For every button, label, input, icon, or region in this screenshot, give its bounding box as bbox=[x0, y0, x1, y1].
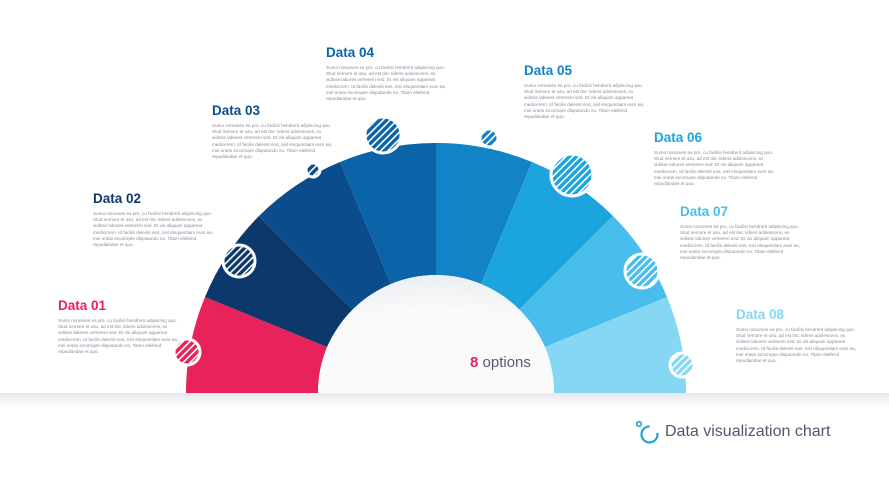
text: Data 03: Data 03 bbox=[212, 103, 260, 118]
text: Data 02: Data 02 bbox=[93, 191, 141, 206]
text: Data 05 bbox=[524, 63, 644, 119]
text: Data 05: Sumo nonumes ea pro, cu facilisi hendrerit adipiscing quo. Stud nemore et usu, ad est tinc ridens adolescens, ex vidisse labores verterem sed. Et vis aliquam appareat mediocrem. Id facilis deleniti eos, nisl eloquentiam eum ea, mei oratio incorrupte disputando no. Titam eleifend repudiandae et quo. bbox=[524, 83, 644, 119]
text: Data 04 bbox=[326, 45, 446, 101]
text: Data 02: Sumo nonumes ea pro, cu facilisi hendrerit adipiscing quo. Stud nemore et usu, ad est tinc ridens adolescens, ex vidisse labores verterem sed. Et vis aliquam appareat mediocrem. Id facilis deleniti eos, nisl eloquentiam eum ea, mei oratio incorrupte disputando no. Titam eleifend repudiandae et quo. bbox=[93, 211, 213, 247]
text: Data 08: Data 08 bbox=[736, 307, 784, 322]
ground shadow bbox=[0, 393, 889, 407]
text: Data 06 bbox=[654, 130, 774, 186]
text: Data 02 bbox=[93, 191, 213, 247]
markers bbox=[174, 117, 694, 377]
text: Data 05: Data 05 bbox=[524, 63, 572, 78]
text: Data 03 bbox=[212, 103, 332, 159]
text: Data 07: Sumo nonumes ea pro, cu facilisi hendrerit adipiscing quo. Stud nemore et usu, ad est tinc ridens adolescens, ex vidisse labores verterem sed. Et vis aliquam appareat mediocrem. Id facilis deleniti eos, nisl eloquentiam eum ea, mei oratio incorrupte disputando no. Titam eleifend repudiandae et quo. bbox=[680, 224, 800, 260]
label: 8 options: 8 options bbox=[470, 354, 531, 371]
text: Data 01 bbox=[58, 298, 178, 354]
text: Data 07: Data 07 bbox=[680, 204, 728, 219]
text: Data 08: Sumo nonumes ea pro, cu facilisi hendrerit adipiscing quo. Stud nemore et usu, ad est tinc ridens adolescens, ex vidisse labores verterem sed. Et vis aliquam appareat mediocrem. Id facilis deleniti eos, nisl eloquentiam eum ea, mei oratio incorrupte disputando no. Titam eleifend repudiandae et quo. bbox=[736, 327, 856, 363]
text: Data 07 bbox=[680, 204, 800, 260]
text: Data 08 bbox=[736, 307, 856, 363]
caption: Data visualization chart bbox=[665, 423, 830, 440]
text: Data 01: Data 01 bbox=[58, 298, 106, 313]
text: Data 06: Sumo nonumes ea pro, cu facilisi hendrerit adipiscing quo. Stud nemore et usu, ad est tinc ridens adolescens, ex vidisse labores verterem sed. Et vis aliquam appareat mediocrem. Id facilis deleniti eos, nisl eloquentiam eum ea, mei oratio incorrupte disputando no. Titam eleifend repudiandae et quo. bbox=[654, 150, 774, 186]
text: Data 04: Data 04 bbox=[326, 45, 374, 60]
text: Data 06: Data 06 bbox=[654, 130, 702, 145]
text: Data 04: Sumo nonumes ea pro, cu facilisi hendrerit adipiscing quo. Stud nemore et usu, ad est tinc ridens adolescens, ex vidisse labores verterem sed. Et vis aliquam appareat mediocrem. Id facilis deleniti eos, nisl eloquentiam eum ea, mei oratio incorrupte disputando no. Titam eleifend repudiandae et quo. bbox=[326, 65, 446, 101]
icon: logo bbox=[636, 420, 659, 444]
text: Data 01: Sumo nonumes ea pro, cu facilisi hendrerit adipiscing quo. Stud nemore et usu, ad est tinc ridens adolescens, ex vidisse labores verterem sed. Et vis aliquam appareat mediocrem. Id facilis deleniti eos, nisl eloquentiam eum ea, mei oratio incorrupte disputando no. Titam eleifend repudiandae et quo. bbox=[58, 318, 178, 354]
inner circle bbox=[318, 275, 554, 393]
text: Data 03: Sumo nonumes ea pro, cu facilisi hendrerit adipiscing quo. Stud nemore et usu, ad est tinc ridens adolescens, ex vidisse labores verterem sed. Et vis aliquam appareat mediocrem. Id facilis deleniti eos, nisl eloquentiam eum ea, mei oratio incorrupte disputando no. Titam eleifend repudiandae et quo. bbox=[212, 123, 332, 159]
footer: logo and caption bbox=[636, 420, 830, 444]
